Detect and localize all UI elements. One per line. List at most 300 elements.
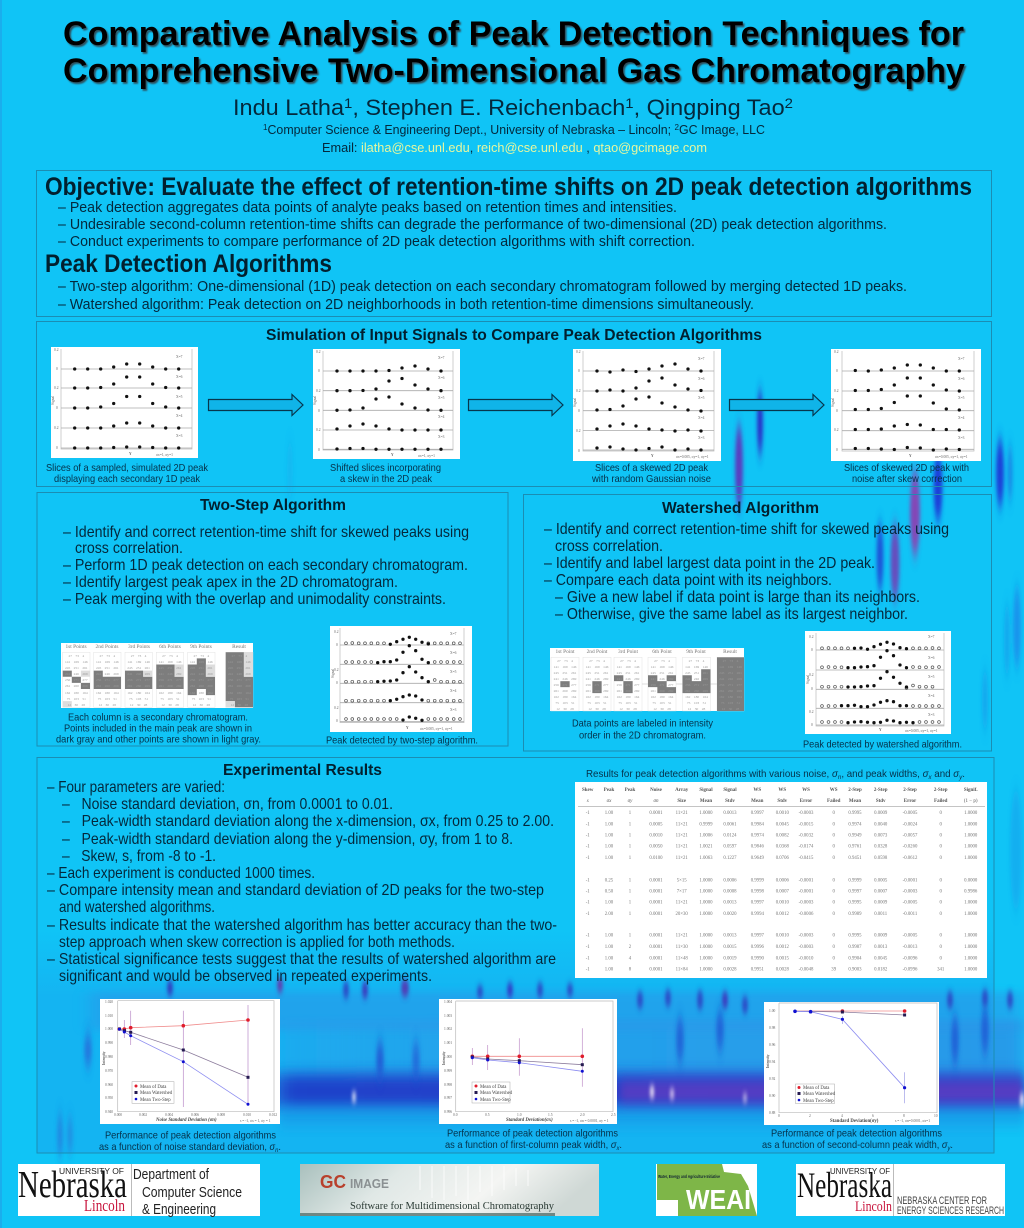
chart: sampled simulated 2D peak: 0.2 xyxy=(54,348,59,352)
caption: two-step grids: dark gray and other points are shown in light gray. xyxy=(56,734,261,746)
chart: intensity vs first-column peak width: s = -1, σn = 0.0001, σy = 1 xyxy=(570,1119,609,1124)
chart: intensity vs noise standard deviation: 0.950 xyxy=(105,1096,113,1100)
results table: 1.00 xyxy=(605,845,614,850)
figure: watershed labelling grids: 162 180 164 xyxy=(617,695,640,699)
chart: intensity vs first-column peak width: 0.999 xyxy=(444,1069,452,1073)
chart: peak detected by watershed algorithm: X=5 xyxy=(928,675,935,679)
figure: two-step labelling grids: 141 169 146 xyxy=(127,660,150,664)
caption: chart second-column width: Performance of peak detection algorithms xyxy=(771,1128,942,1140)
results table: -1 xyxy=(586,934,590,939)
chart: intensity vs second-column peak width: 0.96 xyxy=(769,1043,775,1047)
figure: watershed labelling grids: 256 271 277 xyxy=(719,683,742,687)
chart: peak detected by watershed algorithm: Y xyxy=(879,728,882,732)
results table: 1.0063 xyxy=(699,856,713,861)
figure: watershed labelling grids: 12 30 28 xyxy=(688,707,705,711)
chart: peak detected by two-step algorithm: 0.2 xyxy=(334,668,339,672)
results table: 0.50 xyxy=(605,890,614,895)
results table: 0.0124 xyxy=(723,834,737,839)
chart: shifted slices: X=3 xyxy=(438,435,445,439)
chart: noise after skew correction: 0.2 xyxy=(834,428,839,432)
figure: two-step labelling grids: 141 169 146 xyxy=(96,660,119,664)
figure: watershed labelling grids: 241 246 269 xyxy=(554,677,577,681)
chart: skewed peak with noise: X=7 xyxy=(698,357,705,361)
chart: intensity vs noise standard deviation: s = -1, σx = 1, σy = 1 xyxy=(240,1119,271,1124)
figure: watershed labelling grids: 245 251 261 xyxy=(651,671,674,675)
results table: 0.0019 xyxy=(723,956,737,961)
results table: 1.00 xyxy=(605,968,614,973)
figure: two-step labelling grids: 27 73 4 xyxy=(162,654,178,658)
chart: intensity vs second-column peak width: 8 xyxy=(903,1114,905,1118)
results table: 0.0045 xyxy=(776,822,789,828)
figure: two-step labelling grids: 256 271 277 xyxy=(65,678,88,682)
logo: Nebraska energy sciences: Lincoln xyxy=(855,1199,892,1215)
results table: 0.0007 xyxy=(776,890,789,895)
figure: two-step labelling grids: 162 180 164 xyxy=(127,691,150,695)
captions: simulation charts xyxy=(46,463,969,485)
two-step bullets xyxy=(63,524,469,608)
caption: watershed grids: order in the 2D chromatogram. xyxy=(579,730,706,742)
watershed bullets: – Otherwise, give the same label as its largest neighbor. xyxy=(555,606,908,623)
caption: chart first-column width: . xyxy=(619,1140,622,1151)
chart: intensity vs second-column peak width: 0 xyxy=(778,1114,780,1118)
figure: two-step labelling grids: 241 246 269 xyxy=(190,672,213,676)
chart: skewed peak with noise: 0 xyxy=(578,409,580,413)
chart: intensity vs second-column peak width: 0.94 xyxy=(769,1060,775,1064)
results table: 0.0001 xyxy=(649,968,663,973)
results table: 1.0000 xyxy=(699,945,713,950)
chart: intensity vs noise standard deviation: 0.002 xyxy=(139,1113,147,1117)
chart: noise after skew correction xyxy=(831,349,981,461)
chart: intensity vs noise standard deviation: Noise Standard Deviation (σn) xyxy=(155,1118,217,1123)
logo: Nebraska computer science xyxy=(18,1164,260,1218)
results table: -0.0013 xyxy=(903,945,918,950)
chart: peak detected by watershed algorithm: X=6 xyxy=(928,656,935,660)
title: Comprehensive Two-Dimensional Gas Chromatography xyxy=(63,52,965,90)
two-step bullets: – Identify and correct retention-time shift for skewed peaks using xyxy=(63,524,469,541)
chart: intensity vs second-column peak width xyxy=(764,1002,939,1125)
algorithm bullets: – Two-step algorithm: One-dimensional (1D) peak detection on each secondary chromatogram followed by merging detected 1D peaks. xyxy=(58,279,907,295)
results table: 0.9999 xyxy=(848,878,862,883)
results table: Size xyxy=(677,799,687,804)
experimental bullets: – Peak-width standard deviation along the x-dimension, σx, from 0.25 to 2.00. xyxy=(62,813,554,830)
results table: 5×15 xyxy=(677,878,687,883)
results table: -1 xyxy=(586,811,590,816)
chart: shifted slices: σx=1, σy=1 xyxy=(418,454,435,459)
results table: 11×30 xyxy=(676,945,688,950)
results table xyxy=(575,782,987,978)
experimental bullets: – Each experiment is conducted 1000 times. xyxy=(47,865,315,882)
results table: 0.0001 xyxy=(649,912,663,917)
results table: 0.9989 xyxy=(848,912,862,917)
results table: -1 xyxy=(586,945,590,950)
figure: two-step labelling grids: 245 251 261 xyxy=(127,666,150,670)
figure: watershed labelling grids: 256 271 277 xyxy=(554,683,577,687)
chart: shifted slices: X=5 xyxy=(438,396,445,400)
figure: watershed labelling grids: 261 260 269 xyxy=(554,689,577,693)
objective bullets: – Peak detection aggregates data points of analyte peaks based on retention times and intensities. xyxy=(58,200,677,216)
results table: σx xyxy=(607,799,612,804)
results table: 11×21 xyxy=(676,856,688,861)
affiliations: 2 xyxy=(675,122,679,132)
results table: 0.9974 xyxy=(751,834,764,839)
chart: noise after skew correction: σx=0.005, σy=1, σy=1 xyxy=(935,455,968,460)
figure: watershed labelling grids: 75 103 51 xyxy=(555,701,575,705)
chart: skewed peak with noise: X=3 xyxy=(698,436,705,440)
results table: 1.0000 xyxy=(964,901,978,906)
results table: 0.0040 xyxy=(874,822,888,828)
results table: -0.0005 xyxy=(903,901,918,906)
authors: 1 xyxy=(344,95,353,111)
logo: Nebraska energy sciences: Nebraska xyxy=(797,1165,892,1205)
watershed bullets xyxy=(544,521,949,623)
figure: watershed labelling grids: 27 73 4 xyxy=(689,659,705,663)
results table: 11×21 xyxy=(676,901,688,906)
chart: shifted slices: 0 xyxy=(318,409,320,413)
chart: intensity vs noise standard deviation: 0.970 xyxy=(105,1069,113,1073)
chart: intensity vs noise standard deviation: 1.020 xyxy=(105,1000,113,1004)
results table: 0.9995 xyxy=(848,901,862,906)
figure: watershed labelling grids: 245 251 261 xyxy=(617,671,640,675)
caption: watershed peak: Peak detected by watershed algorithm. xyxy=(803,740,962,750)
chart: noise after skew correction: 0 xyxy=(836,409,838,413)
results table: 0.0028 xyxy=(723,968,737,973)
authors: Indu Latha xyxy=(233,95,337,120)
results table: 1.0000 xyxy=(699,878,713,883)
chart: intensity vs second-column peak width: 0.90 xyxy=(769,1094,775,1098)
figure: two-step labelling grids: 261 260 269 xyxy=(190,684,213,688)
results table: 1.0006 xyxy=(699,834,713,839)
logo: Nebraska energy sciences: UNIVERSITY OF xyxy=(830,1167,890,1176)
figure: two-step labelling grids: 27 73 4 xyxy=(99,654,115,658)
caption: chart second-column width xyxy=(762,1128,953,1152)
logo: Nebraska computer science: Computer Science xyxy=(142,1184,242,1201)
figure: watershed labelling grids: 75 103 51 xyxy=(587,701,607,705)
results table: Signal xyxy=(723,788,737,793)
results table: 1 xyxy=(629,811,632,816)
figure: two-step labelling grids: 141 169 146 xyxy=(65,660,88,664)
results table: 0.0368 xyxy=(776,845,789,850)
logo: Nebraska computer science: & Engineering xyxy=(142,1201,216,1218)
results table: 0.9998 xyxy=(751,890,764,895)
figure: watershed labelling grids: 75 103 51 xyxy=(618,701,638,705)
results table: -1 xyxy=(586,901,590,906)
chart: skewed peak with noise: 0 xyxy=(578,449,580,453)
results table: 0.9990 xyxy=(751,956,764,961)
chart: peak detected by watershed algorithm: 0.2 xyxy=(809,710,814,714)
chart: peak detected by two-step algorithm: X=3 xyxy=(450,708,457,712)
figure: watershed labelling grids: 261 260 269 xyxy=(719,689,742,693)
results table: 0.0010 xyxy=(649,834,663,839)
results table: 0 xyxy=(939,834,942,839)
results table: 0.0073 xyxy=(874,834,888,839)
chart: intensity vs first-column peak width: 1.002 xyxy=(444,1027,452,1031)
results table: 1.00 xyxy=(605,934,614,939)
chart: intensity vs first-column peak width: 2.5 xyxy=(611,1113,616,1117)
chart: shifted slices: Signal xyxy=(313,396,317,405)
results table: 0.0013 xyxy=(723,934,737,939)
chart: shifted slices: 0.2 xyxy=(316,428,321,432)
results table title: y xyxy=(958,774,963,781)
results table: Peak xyxy=(625,788,635,793)
results table: -0.0011 xyxy=(903,912,918,917)
algorithm bullets xyxy=(58,279,907,313)
results table: 0.0001 xyxy=(649,890,663,895)
chart: skewed peak with noise: 0.2 xyxy=(576,389,581,393)
figure: watershed labelling grids: 162 180 164 xyxy=(651,695,674,699)
chart: sampled simulated 2D peak: Signal xyxy=(51,396,55,405)
chart: intensity vs noise standard deviation: 0.004 xyxy=(165,1113,173,1117)
caption: watershed grids: Data points are labeled in intensity xyxy=(572,718,714,730)
results table: 0.0028 xyxy=(776,968,789,973)
caption: chart noise: Performance of peak detection algorithms xyxy=(105,1130,276,1142)
figure: watershed labelling grids: 245 251 261 xyxy=(586,671,609,675)
figure: two-step labelling grids: 245 251 261 xyxy=(96,666,119,670)
chart: intensity vs second-column peak width: Mean of Data xyxy=(803,1086,830,1091)
logo: GC Image: GC xyxy=(320,1172,346,1192)
chart: intensity vs second-column peak width: Mean Two-Step xyxy=(803,1099,834,1104)
results table: 0.9995 xyxy=(848,934,862,939)
results table: 0 xyxy=(939,856,942,861)
results table: 0.9451 xyxy=(848,856,862,861)
results table: -0.0260 xyxy=(903,845,918,850)
chart: intensity vs noise standard deviation: Mean Watershed xyxy=(140,1091,173,1096)
results table: 1 xyxy=(629,834,632,839)
arrow 1 xyxy=(208,394,303,416)
results table: 0 xyxy=(939,822,942,828)
results table: 0 xyxy=(832,878,835,883)
results table: 0.0010 xyxy=(776,934,789,939)
results table: Mean xyxy=(751,799,764,804)
results table: 0.0011 xyxy=(874,912,888,917)
figure: watershed labelling grids: 162 180 164 xyxy=(685,695,708,699)
captions: simulation charts: Slices of a sampled, simulated 2D peak xyxy=(46,463,209,474)
figure: watershed labelling grids: 241 246 269 xyxy=(685,677,708,681)
chart: peak detected by watershed algorithm: 0.2 xyxy=(809,635,814,639)
results table: 1.0000 xyxy=(699,934,713,939)
chart: skewed peak with noise: 0.2 xyxy=(576,350,581,354)
results table: 0.0001 xyxy=(649,934,663,939)
objective bullets xyxy=(58,200,887,250)
caption: two-step grids: Points included in the main peak are shown in xyxy=(64,724,252,734)
results table: -0.0003 xyxy=(799,901,814,906)
chart: shifted slices: X=6 xyxy=(438,376,445,380)
figure: watershed labelling grids: 2nd Point xyxy=(587,649,608,655)
caption: watershed grids xyxy=(572,718,714,742)
results table: 0.0000 xyxy=(964,878,978,883)
figure: watershed labelling grids: 241 246 269 xyxy=(586,677,609,681)
chart: intensity vs second-column peak width: 4 xyxy=(841,1114,843,1118)
results table: 1.0000 xyxy=(964,856,978,861)
results table: 0.0328 xyxy=(874,845,888,850)
chart: shifted slices: 0 xyxy=(318,369,320,373)
caption: two-step grids xyxy=(56,712,261,746)
results table: 0 xyxy=(939,845,942,850)
captions: simulation charts: with random Gaussian noise xyxy=(591,474,711,485)
objective bullets: – Undesirable second-column retention-time shifts can degrade the performance of two-dimensional (2D) peak detection algorithms. xyxy=(58,217,887,233)
experimental bullets: – Noise standard deviation, σn, from 0.0001 to 0.01. xyxy=(62,796,393,813)
results table: -1 xyxy=(586,878,590,883)
results table: 2-Step xyxy=(848,788,862,793)
figure: two-step labelling grids: 9th Points xyxy=(190,644,212,650)
figure: watershed labelling grids: 245 251 261 xyxy=(685,671,708,675)
results table: -1 xyxy=(586,845,590,850)
chart: intensity vs first-column peak width: 1.5 xyxy=(548,1113,553,1117)
figure: watershed labelling grids: 162 180 164 xyxy=(586,695,609,699)
chart: shifted slices: Y xyxy=(391,453,394,457)
chart: intensity vs first-column peak width: 0.997 xyxy=(444,1096,452,1100)
results table: 0 xyxy=(832,811,835,816)
chart: peak detected by two-step algorithm: X=4 xyxy=(450,689,457,693)
experimental bullets: – Results indicate that the watershed algorithm has better accuracy than the two- xyxy=(47,917,557,934)
figure: two-step labelling grids: 12 30 28 xyxy=(130,703,148,707)
results table: 1.00 xyxy=(605,856,614,861)
chart: noise after skew correction: X=4 xyxy=(958,416,965,420)
chart: peak detected by watershed algorithm: X=4 xyxy=(928,694,935,698)
results table: -0.0003 xyxy=(799,934,814,939)
experimental bullets: – Compare intensity mean and standard deviation of 2D peaks for the two-step xyxy=(47,882,544,899)
results table: Error xyxy=(800,799,813,804)
results table: 1.0000 xyxy=(699,811,713,816)
results table: -0.0001 xyxy=(903,878,918,883)
chart: peak detected by two-step algorithm: 0 xyxy=(336,681,338,685)
figure: two-step labelling grids: 256 271 277 xyxy=(228,678,251,682)
figure: two-step labelling grids: 1st Points xyxy=(65,644,87,650)
watershed bullets: – Give a new label if data point is large than its neighbors. xyxy=(555,589,920,606)
results table: 0 xyxy=(832,856,835,861)
results table title: n xyxy=(838,774,842,781)
chart: peak detected by two-step algorithm: 0.2 xyxy=(334,706,339,710)
results table: 11×21 xyxy=(676,811,688,816)
results table: 11×21 xyxy=(676,934,688,939)
chart: intensity vs second-column peak width: 10 xyxy=(934,1114,938,1118)
chart: intensity vs first-column peak width: 0.998 xyxy=(444,1083,452,1087)
results table: 11×48 xyxy=(676,956,688,961)
results table: 0.0013 xyxy=(723,811,737,816)
logo: Nebraska energy sciences xyxy=(796,1164,1005,1217)
chart: sampled simulated 2D peak: 0.2 xyxy=(54,386,59,390)
chart: shifted slices: 0 xyxy=(318,448,320,452)
results table: 0.0061 xyxy=(723,822,737,828)
results table: 0 xyxy=(832,901,835,906)
results table: 0 xyxy=(939,956,942,961)
results table: Error xyxy=(904,799,917,804)
chart: intensity vs noise standard deviation: 0.000 xyxy=(114,1113,122,1117)
captions: simulation charts: noise after skew correction xyxy=(852,474,962,485)
results table: Noise xyxy=(650,788,663,793)
results table: -0.0001 xyxy=(799,878,814,883)
results table: 0 xyxy=(939,912,942,917)
results table: 0.9987 xyxy=(848,945,862,950)
chart: intensity vs second-column peak width: Intensity xyxy=(766,1054,770,1068)
results table: 0.0182 xyxy=(874,968,888,973)
chart: peak detected by watershed algorithm: σx=0.005, σy=1, σy=1 xyxy=(905,729,938,734)
results table: 0 xyxy=(939,811,942,816)
chart: skewed peak with noise: σx=0.005, σy=1, σy=1 xyxy=(676,455,709,460)
watershed bullets: cross correlation. xyxy=(555,538,663,555)
results table: 0.0020 xyxy=(723,912,737,917)
algorithm bullets: – Watershed algorithm: Peak detection on 2D neighborhoods in both retention-time dimensions simultaneously. xyxy=(58,297,754,313)
figure: two-step labelling grids: 162 180 164 xyxy=(96,691,119,695)
chart: noise after skew correction: Y xyxy=(909,454,912,458)
results table: WS xyxy=(778,788,786,793)
results table: 1 xyxy=(629,856,632,861)
title: Comparative Analysis of Peak Detection Techniques for xyxy=(63,15,964,53)
results table: 0.9995 xyxy=(848,811,862,816)
chart: peak detected by two-step algorithm: X=5 xyxy=(450,670,457,674)
results table: 0.9846 xyxy=(751,845,764,850)
results table: 0.0012 xyxy=(776,912,789,917)
figure: two-step labelling grids: 245 251 261 xyxy=(159,666,182,670)
chart: shifted slices: 0.2 xyxy=(316,350,321,354)
arrow 2 xyxy=(468,394,563,416)
figure: watershed labelling grids: 75 103 51 xyxy=(652,701,672,705)
chart: intensity vs noise standard deviation: 1.010 xyxy=(105,1014,113,1018)
figure: two-step labelling grids: 27 73 4 xyxy=(131,654,147,658)
results table: 0.9986 xyxy=(964,890,978,895)
logo: GC Image: IMAGE xyxy=(350,1176,389,1191)
experimental bullets: – Statistical significance tests suggest that the results of watershed algorithm are xyxy=(47,951,556,968)
chart: intensity vs noise standard deviation: 0.990 xyxy=(105,1041,113,1045)
chart: intensity vs first-column peak width: 1.001 xyxy=(444,1041,452,1045)
figure: watershed labelling grids: 3rd Point xyxy=(618,649,638,655)
results table: 1.00 xyxy=(605,822,614,828)
figure: two-step labelling grids: 12 30 28 xyxy=(99,703,116,707)
results table: 0.0010 xyxy=(776,901,789,906)
results table: 1.0000 xyxy=(964,934,978,939)
results table: WS xyxy=(830,788,838,793)
results table: 0.0001 xyxy=(649,811,663,816)
figure: two-step labelling grids: 241 246 269 xyxy=(65,672,88,676)
chart: intensity vs noise standard deviation: Mean Two-Step xyxy=(140,1098,171,1103)
chart: sampled simulated 2D peak: σx=1, σy=1 xyxy=(156,453,173,458)
results table title: . xyxy=(962,769,965,780)
results table: -0.0010 xyxy=(799,956,814,961)
figure: two-step labelling grids: 141 169 146 xyxy=(190,660,213,664)
results table: 0.9999 xyxy=(699,822,713,828)
figure: watershed labelling grids: 241 246 269 xyxy=(719,677,742,681)
results table: -0.0048 xyxy=(799,968,814,973)
results table: 2.00 xyxy=(605,912,614,917)
chart: peak detected by watershed algorithm: 0 xyxy=(811,648,813,652)
results table: 0.9997 xyxy=(751,934,764,939)
chart: intensity vs first-column peak width: 1.003 xyxy=(444,1014,452,1018)
chart: intensity vs first-column peak width: Mean of Data xyxy=(480,1085,507,1090)
two-step bullets: – Perform 1D peak detection on each secondary chromatogram. xyxy=(63,557,468,574)
figure: watershed labelling grids: 27 73 4 xyxy=(557,659,573,663)
figure: two-step labelling grids: 256 271 277 xyxy=(96,678,119,682)
results table: 0.25 xyxy=(605,878,614,883)
results table: 1.0000 xyxy=(964,845,978,850)
experimental bullets xyxy=(47,779,557,985)
results table: 1.0000 xyxy=(964,945,978,950)
chart: peak detected by two-step algorithm: 0.2 xyxy=(334,630,339,634)
chart: intensity vs first-column peak width: 0.0 xyxy=(453,1113,458,1117)
results table: -0.0001 xyxy=(799,890,814,895)
heading: watershed: Watershed Algorithm xyxy=(662,500,819,517)
figure: watershed labelling grids: 141 169 146 xyxy=(586,665,609,669)
chart: peak detected by two-step algorithm: 0 xyxy=(336,643,338,647)
chart: noise after skew correction: 0.2 xyxy=(834,350,839,354)
results table: -0.0096 xyxy=(903,956,918,961)
results table: -0.0032 xyxy=(799,834,814,839)
caption: two-step grids: Each column is a secondary chromatogram. xyxy=(68,712,248,724)
logo: Nebraska computer science: UNIVERSITY OF xyxy=(59,1167,124,1176)
two-step bullets: cross correlation. xyxy=(75,540,183,557)
results table: (1 − p) xyxy=(964,799,978,804)
figure: watershed labelling grids: 9th Point xyxy=(686,649,706,655)
experimental bullets: and watershed algorithms. xyxy=(59,899,215,916)
chart: peak detected by two-step algorithm: σx=0.005, σy=1, σy=1 xyxy=(420,727,453,732)
